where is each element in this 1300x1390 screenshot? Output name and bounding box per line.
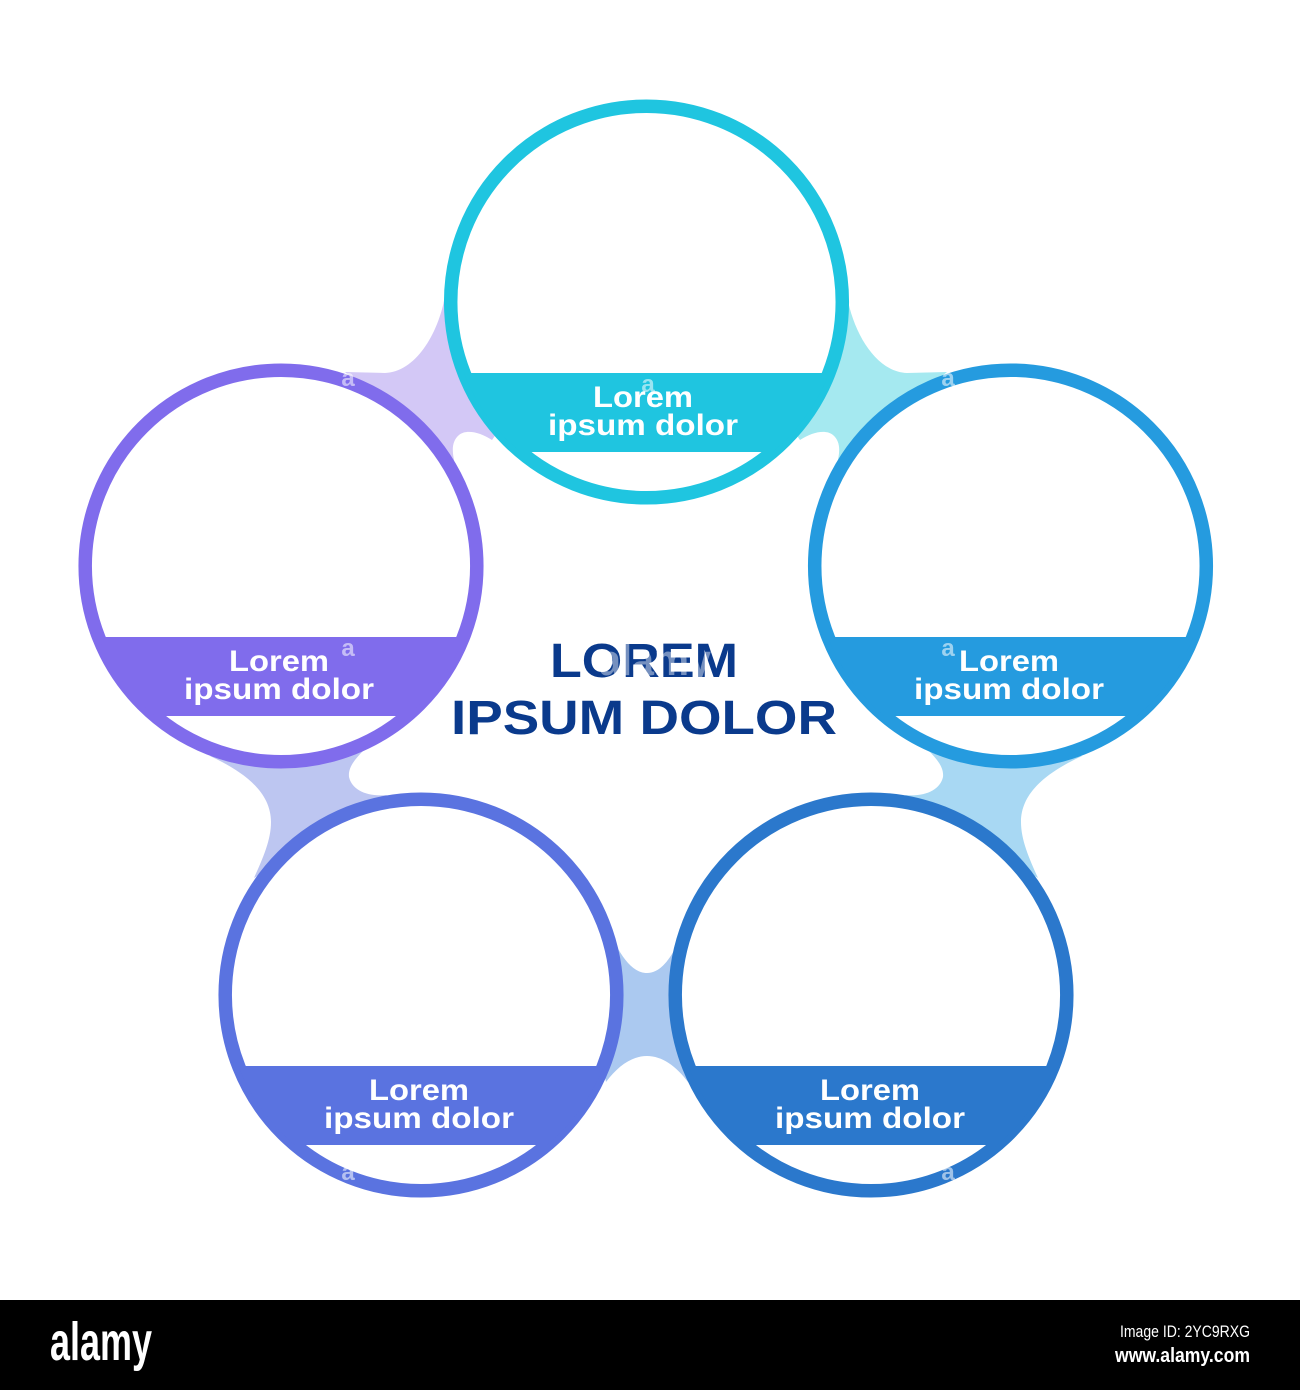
footer bar xyxy=(0,1300,1300,1390)
band: top circle xyxy=(471,373,822,452)
band: bottom right circle xyxy=(696,1066,1046,1145)
watermark ghost marks xyxy=(341,365,955,1186)
label: left circle: ipsum dolor xyxy=(184,673,374,706)
watermark ghost marks: a xyxy=(341,635,355,662)
band: bottom left circle xyxy=(246,1066,596,1145)
watermark ghost marks: alamy xyxy=(599,636,711,685)
panel: bottom left circle xyxy=(215,799,627,1191)
connector: left to top xyxy=(345,296,520,464)
connector: bottom left to left xyxy=(210,740,387,878)
connector: right to bottom right xyxy=(905,740,1082,878)
label: bottom right circle: Lorem xyxy=(820,1074,920,1107)
watermark ghost marks: a xyxy=(341,365,355,392)
panel: top circle xyxy=(440,106,852,498)
panel: bottom right circle xyxy=(665,799,1077,1191)
band: right circle xyxy=(835,637,1186,716)
footer url: www.alamy.com xyxy=(1114,1345,1250,1367)
watermark ghost marks: a xyxy=(941,1159,955,1186)
footer logo: alamy xyxy=(50,1312,152,1372)
label: top circle: ipsum dolor xyxy=(548,409,738,442)
panel: left circle xyxy=(75,370,487,762)
label: right circle: ipsum dolor xyxy=(914,673,1104,706)
connector: bottom right to bottom left xyxy=(590,945,700,1082)
title: IPSUM DOLOR xyxy=(451,691,837,745)
label: bottom left circle: ipsum dolor xyxy=(324,1102,514,1135)
watermark ghost marks: a xyxy=(341,1159,355,1186)
panel: right circle xyxy=(805,370,1217,762)
connector: top to right xyxy=(772,296,947,464)
band: left circle xyxy=(106,637,456,716)
watermark ghost marks: a xyxy=(941,365,955,392)
footer image id: Image ID: 2YC9RXG xyxy=(1120,1322,1250,1341)
label: right circle: Lorem xyxy=(959,645,1059,678)
label: top circle: Lorem xyxy=(593,381,693,414)
watermark ghost marks: a xyxy=(941,635,955,662)
watermark ghost marks: a xyxy=(641,371,655,398)
label: left circle: Lorem xyxy=(229,645,329,678)
label: bottom left circle: Lorem xyxy=(369,1074,469,1107)
title: LOREM xyxy=(550,634,738,688)
label: bottom right circle: ipsum dolor xyxy=(775,1102,965,1135)
